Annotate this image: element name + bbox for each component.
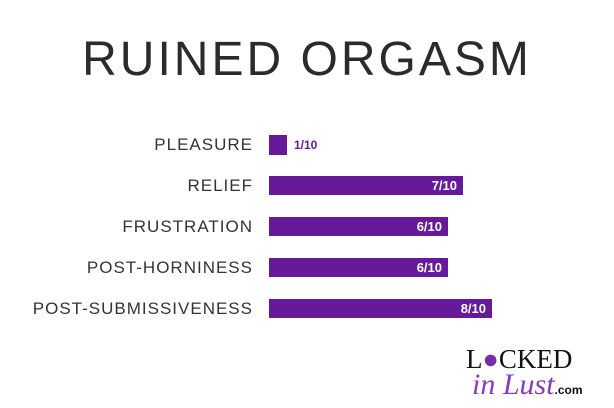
label: post-submissiveness: POST-SUBMISSIVENESS bbox=[33, 299, 253, 318]
label: post-horniness: POST-HORNINESS bbox=[87, 258, 253, 277]
title: RUINED ORGASM bbox=[82, 33, 532, 86]
logo text: locked: L●CKED bbox=[466, 344, 572, 374]
bar: pleasure bbox=[269, 135, 287, 155]
logo text: in lust: in Lust.com bbox=[472, 368, 583, 401]
label: frustration: FRUSTRATION bbox=[122, 217, 253, 236]
bar: post-submissiveness bbox=[269, 299, 492, 318]
label: relief: RELIEF bbox=[187, 176, 253, 195]
bar: post-horniness bbox=[269, 258, 448, 277]
bar: post-horniness: 6/10 bbox=[417, 260, 442, 275]
bar: relief bbox=[269, 176, 463, 195]
label: pleasure: PLEASURE bbox=[154, 135, 253, 154]
bar: frustration: 6/10 bbox=[417, 219, 442, 234]
value: pleasure: 1/10 bbox=[294, 138, 317, 152]
chart: ratings bbox=[33, 135, 492, 318]
bar: post-submissiveness: 8/10 bbox=[461, 301, 486, 316]
bar: relief: 7/10 bbox=[432, 178, 457, 193]
logo bbox=[466, 344, 583, 401]
bar: frustration bbox=[269, 217, 448, 236]
